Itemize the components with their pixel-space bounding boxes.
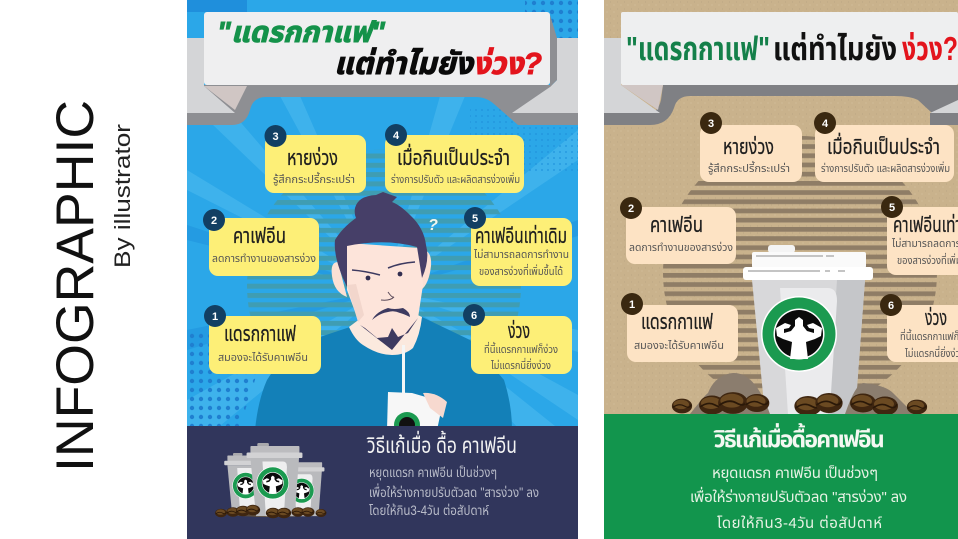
stripes circle [247, 149, 521, 341]
cups group [215, 443, 326, 518]
title line 2: แต่ทำไมยังง่วง? [334, 46, 542, 81]
callout 5 [464, 207, 572, 286]
footer text: โดยให้กิน3-4วัน ต่อสัปดาห์ [369, 502, 489, 518]
title: "แดรกกาแฟ" [626, 30, 770, 67]
callout 6: ที่นี้แดรกกาแฟก็ง่วง [484, 341, 558, 356]
panel: blue infographic [187, 0, 578, 539]
ribbon banner [187, 15, 578, 125]
callout 5: 5 [472, 213, 478, 225]
callout 2: คาเฟอีน [650, 214, 703, 237]
callout 2: คาเฟอีน [233, 225, 286, 248]
footer text: เพื่อให้ร่างกายปรับตัวลด "สารง่วง" ลง [369, 483, 539, 500]
collar and neck [349, 315, 422, 355]
footer text: หยุดแดรก คาเฟอีน เป็นช่วงๆ [369, 464, 497, 481]
callout 6 [463, 304, 572, 374]
callout 6: 6 [471, 310, 477, 322]
callout 5: ของสารง่วงที่เพิ่มขึ้นได้ [479, 263, 563, 278]
stripes circle [663, 136, 937, 410]
man illustration [255, 192, 512, 438]
callout 5: ไม่สามารถลดการทำงาน [473, 248, 569, 261]
title line 1: "แดรกกาแฟ" [217, 17, 386, 49]
callout 3: รู้สึกกระปรี้กระเปร่า [708, 160, 790, 175]
face [347, 244, 422, 318]
title [628, 32, 957, 60]
solution footer [187, 426, 578, 539]
subheading: By illustrator: By illustrator [110, 124, 135, 268]
footer text: เพื่อให้ร่างกายปรับตัวลด "สารง่วง" ลง [690, 486, 907, 506]
footer heading: วิธีแก้เมื่อ ดื้อ คาเฟอีน [366, 430, 517, 458]
brows and eyes [352, 262, 415, 275]
footer heading: วิธีแก้เมื่อดื้อคาเฟอีน [713, 423, 885, 452]
callout 6: ง่วง [925, 306, 947, 330]
background: blue burst [187, 0, 578, 430]
background: kraft paper [604, 0, 958, 420]
callout 1: แดรกกาแฟ [641, 311, 713, 334]
callout 2: 2 [211, 215, 217, 227]
panel: coffee paper infographic [604, 0, 958, 539]
hair [335, 192, 427, 287]
callout 2 [203, 209, 319, 276]
callout 2: ลดการทำงานของสารง่วง [629, 241, 733, 254]
callout 3 [264, 125, 366, 193]
callout 1: 1 [629, 299, 635, 311]
ribbon banner [604, 38, 958, 125]
title card [204, 12, 550, 85]
title: แต่ทำไมยัง [773, 30, 897, 67]
heading: INFOGRAPHIC: INFOGRAPHIC [46, 100, 105, 472]
footer text [690, 464, 907, 532]
shirt [255, 317, 512, 430]
straw [402, 345, 405, 395]
icon: question mark: ? [428, 217, 438, 234]
callout 2: ลดการทำงานของสารง่วง [212, 252, 316, 265]
callout 1 [621, 293, 738, 362]
callout 6: ไม่แดรกนี่ยิ่งง่วง [490, 357, 551, 372]
footer text: หยุดแดรก คาเฟอีน เป็นช่วงๆ [712, 464, 878, 482]
beard [360, 318, 418, 350]
callout 4 [385, 124, 524, 193]
callout 1: แดรกกาแฟ [224, 323, 296, 346]
callout 5: 5 [889, 202, 895, 214]
callout 3: หายง่วง [287, 146, 338, 170]
hand with cup [387, 392, 440, 426]
solution footer [604, 414, 958, 539]
callout 3: รู้สึกกระปรี้กระเปร่า [273, 171, 355, 186]
callout 4: 4 [393, 130, 400, 142]
callout 2 [620, 197, 736, 264]
callout 6: 6 [888, 300, 894, 312]
coffee cup [743, 245, 873, 415]
moustache [372, 308, 410, 320]
callout 5: คาเฟอีนเท่าเดิม [475, 224, 567, 248]
callout 1: 1 [212, 311, 218, 323]
callout 3: 3 [272, 131, 279, 143]
callout 1: สมองจะได้รับคาเฟอีน [634, 340, 724, 352]
callout 4 [814, 112, 954, 182]
callout 3: หายง่วง [723, 135, 774, 159]
footer text [369, 464, 539, 518]
ears [332, 262, 347, 297]
callout 3 [700, 112, 802, 182]
callout 6 [880, 294, 958, 362]
callout 1: สมองจะได้รับคาเฟอีน [218, 352, 308, 364]
coffee beans [672, 373, 927, 416]
callout 1 [204, 305, 321, 374]
footer text: โดยให้กิน3-4วัน ต่อสัปดาห์ [717, 514, 882, 532]
callout 4: เมื่อกินเป็นประจำ [397, 143, 510, 170]
callout 2: 2 [628, 203, 634, 215]
callout 4: ร่างการปรับตัว และผลิตสารง่วงเพิ่ม [391, 172, 520, 186]
callout 3: 3 [708, 118, 714, 130]
callout 5 [881, 196, 958, 275]
callout 6: ง่วง [508, 319, 530, 343]
callout 4: 4 [822, 118, 829, 130]
title card [621, 12, 958, 85]
